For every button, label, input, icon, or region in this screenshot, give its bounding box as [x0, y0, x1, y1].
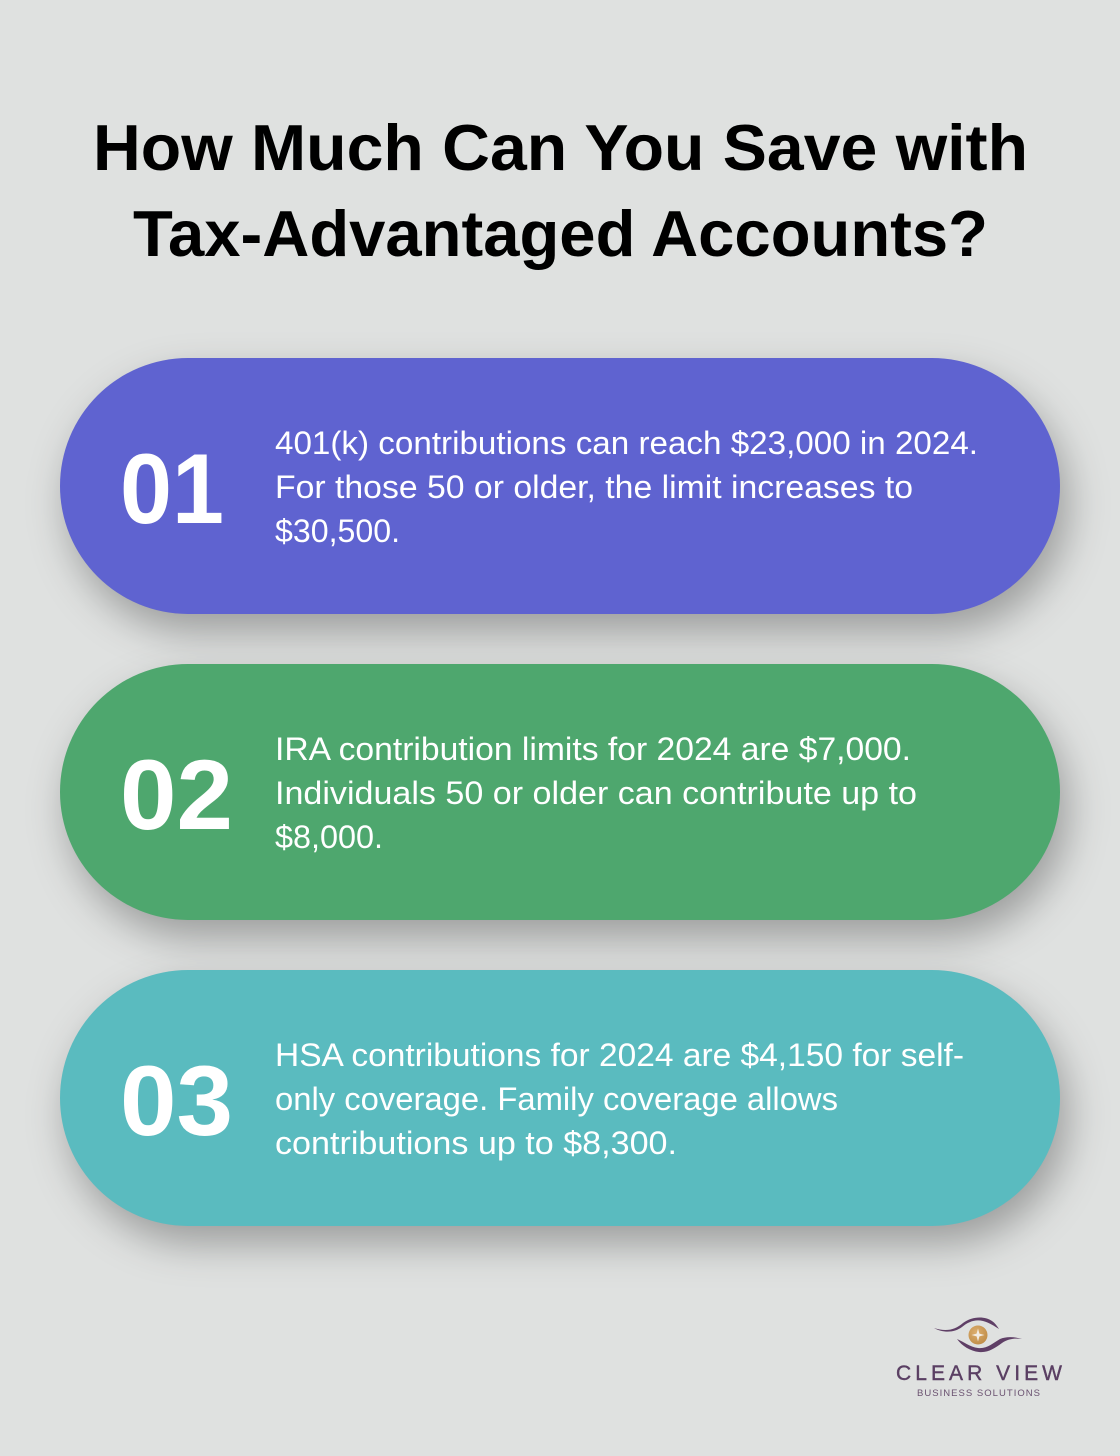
number 01: 01 [120, 433, 224, 544]
logo: Clear View Business Solutions [896, 1317, 1062, 1399]
title: How Much Can You Save with [93, 111, 1028, 184]
logo tagline: BUSINESS SOLUTIONS [917, 1388, 1040, 1399]
title [93, 111, 1028, 270]
text: 401(k) limits: 401(k) contributions can reach $23,000 in 2024. [275, 425, 978, 461]
title: Tax-Advantaged Accounts? [133, 197, 988, 270]
text: IRA limits: $8,000. [275, 819, 383, 855]
text: HSA limits: HSA contributions for 2024 are $4,150 for self- [275, 1037, 964, 1073]
text: HSA limits: only coverage. Family coverage allows [275, 1081, 838, 1117]
text: 401(k) limits: For those 50 or older, the limit increases to [275, 469, 913, 505]
panel: IRA card [60, 664, 1068, 938]
text: IRA limits: Individuals 50 or older can contribute up to [275, 775, 917, 811]
text: IRA limits [275, 731, 917, 855]
text: HSA limits [275, 1037, 964, 1161]
logo wordmark: CLEAR VIEW [896, 1362, 1062, 1385]
number 02: 02 [120, 739, 233, 850]
panel: HSA card [60, 970, 1068, 1244]
icon: eye [934, 1317, 1022, 1352]
panel: 401(k) card [60, 358, 1068, 632]
number 03: 03 [120, 1045, 233, 1156]
text: 401(k) limits [275, 425, 978, 549]
text: 401(k) limits: $30,500. [275, 513, 400, 549]
text: HSA limits: contributions up to $8,300. [275, 1125, 677, 1161]
text: IRA limits: IRA contribution limits for 2024 are $7,000. [275, 731, 911, 767]
